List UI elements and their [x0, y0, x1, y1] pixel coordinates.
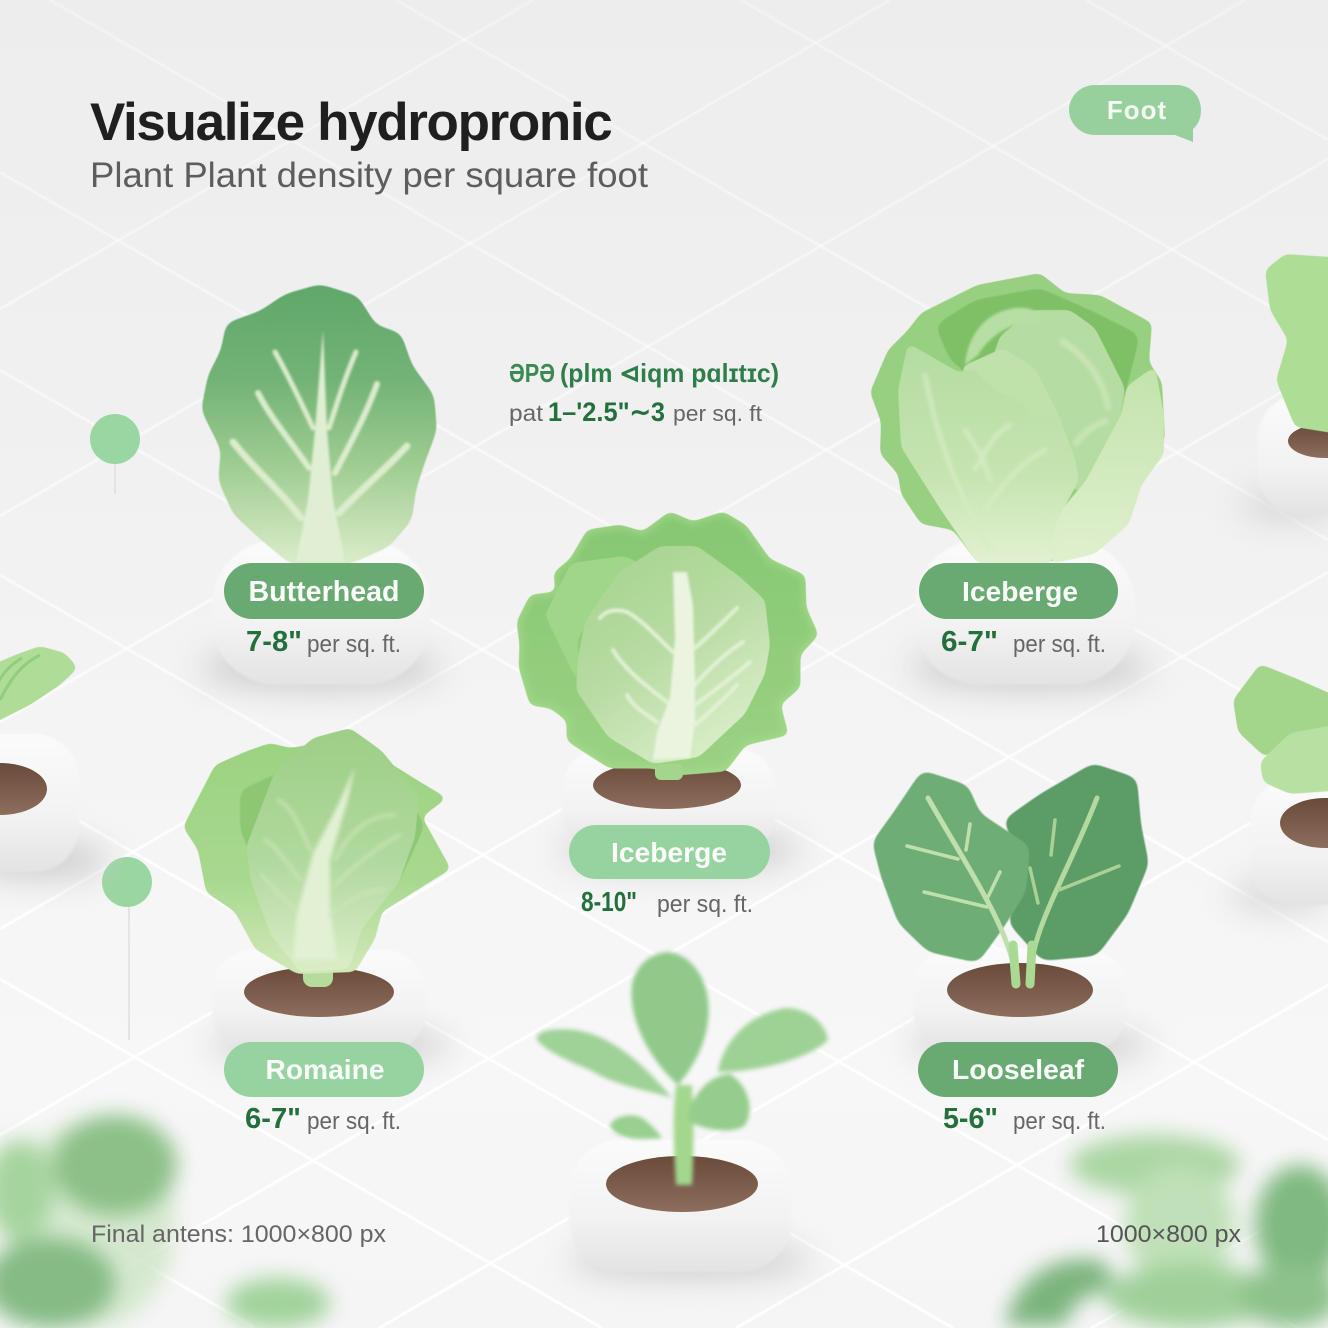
density value: 8-10": [581, 886, 637, 917]
label pill: [569, 825, 770, 879]
pot: [915, 540, 1135, 685]
pot: [212, 540, 430, 685]
label pill: [224, 563, 424, 619]
ribs: [600, 572, 750, 760]
plant: Iceberg top right: Iceberge: [962, 576, 1078, 607]
plant: Butterhead: Butterhead: [248, 576, 400, 608]
leaf: [201, 284, 437, 564]
plant: Butterhead: [200, 284, 440, 690]
plant: Romaine: Romaine: [266, 1054, 384, 1085]
pot: [569, 1140, 792, 1272]
plant: Iceberg center: [518, 513, 817, 918]
speech bubble: Foot: [1069, 85, 1201, 142]
soil: [947, 963, 1093, 1017]
curled inner leaf: [965, 308, 1041, 365]
outer leaves: [183, 738, 451, 974]
label pill: [919, 563, 1118, 619]
density value: 5-6": [943, 1103, 998, 1135]
label pill: [918, 1042, 1118, 1097]
plant: Looseleaf: per sq. ft.: [1013, 1108, 1106, 1135]
density value: 6-7": [941, 626, 998, 658]
pot: [913, 948, 1127, 1053]
marker dot lower left: [102, 857, 152, 1040]
plant: Looseleaf: Looseleaf: [952, 1054, 1085, 1085]
right wrap leaf: [1051, 366, 1164, 564]
soil: [244, 967, 394, 1017]
pot: [562, 748, 776, 853]
outer back leaves and ruffle: [870, 273, 1165, 562]
marker dot upper left: [90, 414, 140, 494]
subtitle: Plant Plant density per square foot: [90, 156, 648, 195]
trunk and veins: [262, 767, 400, 960]
density note: per sq. ft: [673, 401, 762, 426]
footer right: 1000×800 px: [1096, 1221, 1241, 1248]
plant: Iceberg top right: [870, 273, 1165, 690]
dark recess: [935, 288, 1140, 470]
plant: left edge cropped seedling: [0, 646, 110, 878]
speech bubble: Foot: Foot: [1107, 95, 1167, 125]
density note: [509, 358, 779, 427]
label pill: [224, 1042, 424, 1097]
footer left: Final antens: 1000×800 px: [91, 1221, 386, 1248]
pot: [212, 950, 426, 1053]
plant: seedling bottom center: [537, 952, 828, 1278]
density note: ƏPƏ: [509, 358, 555, 388]
stem: [303, 960, 333, 987]
plant: Looseleaf: [872, 763, 1150, 1135]
front left leaf: [898, 343, 1079, 564]
plant: Romaine: [183, 728, 451, 1135]
plant: Iceberg top right: per sq. ft.: [1013, 631, 1106, 658]
blurred foreground foliage left: [0, 1115, 330, 1328]
right leaf: [1003, 763, 1149, 961]
density note: pat: [509, 400, 544, 426]
soil: [606, 1156, 758, 1212]
left inner layer: [545, 556, 652, 692]
cabbage head: [576, 546, 770, 764]
density note: 1–'2.5"∼3: [548, 397, 665, 427]
density note: (plm ⊲iqm pɑlɪtɪc): [560, 358, 779, 388]
plant: Butterhead: per sq. ft.: [307, 631, 401, 658]
left leaf: [872, 770, 1030, 963]
plant: Iceberg center: per sq. ft.: [657, 891, 753, 918]
blurred foreground foliage right: [1005, 1135, 1328, 1328]
density value: 7-8": [246, 626, 302, 658]
cabbage head: [985, 310, 1125, 494]
stems and veins: [907, 798, 1119, 984]
title: Visualize hydropronic: [90, 93, 611, 152]
density value: 6-7": [245, 1103, 301, 1135]
middle leaf: [246, 728, 419, 972]
plant: right edge middle cropped seedling: [1230, 664, 1328, 909]
stem: [655, 764, 683, 780]
ruffled outer leaf: [518, 513, 817, 774]
dark recess: [240, 770, 425, 930]
plant: Iceberg center: Iceberge: [611, 837, 727, 868]
leaf ribs: [233, 330, 407, 562]
soil: [593, 761, 741, 809]
plant: right edge top cropped seedling: [1240, 254, 1328, 519]
plant: Romaine: per sq. ft.: [307, 1108, 401, 1135]
leaves: [537, 952, 828, 1185]
